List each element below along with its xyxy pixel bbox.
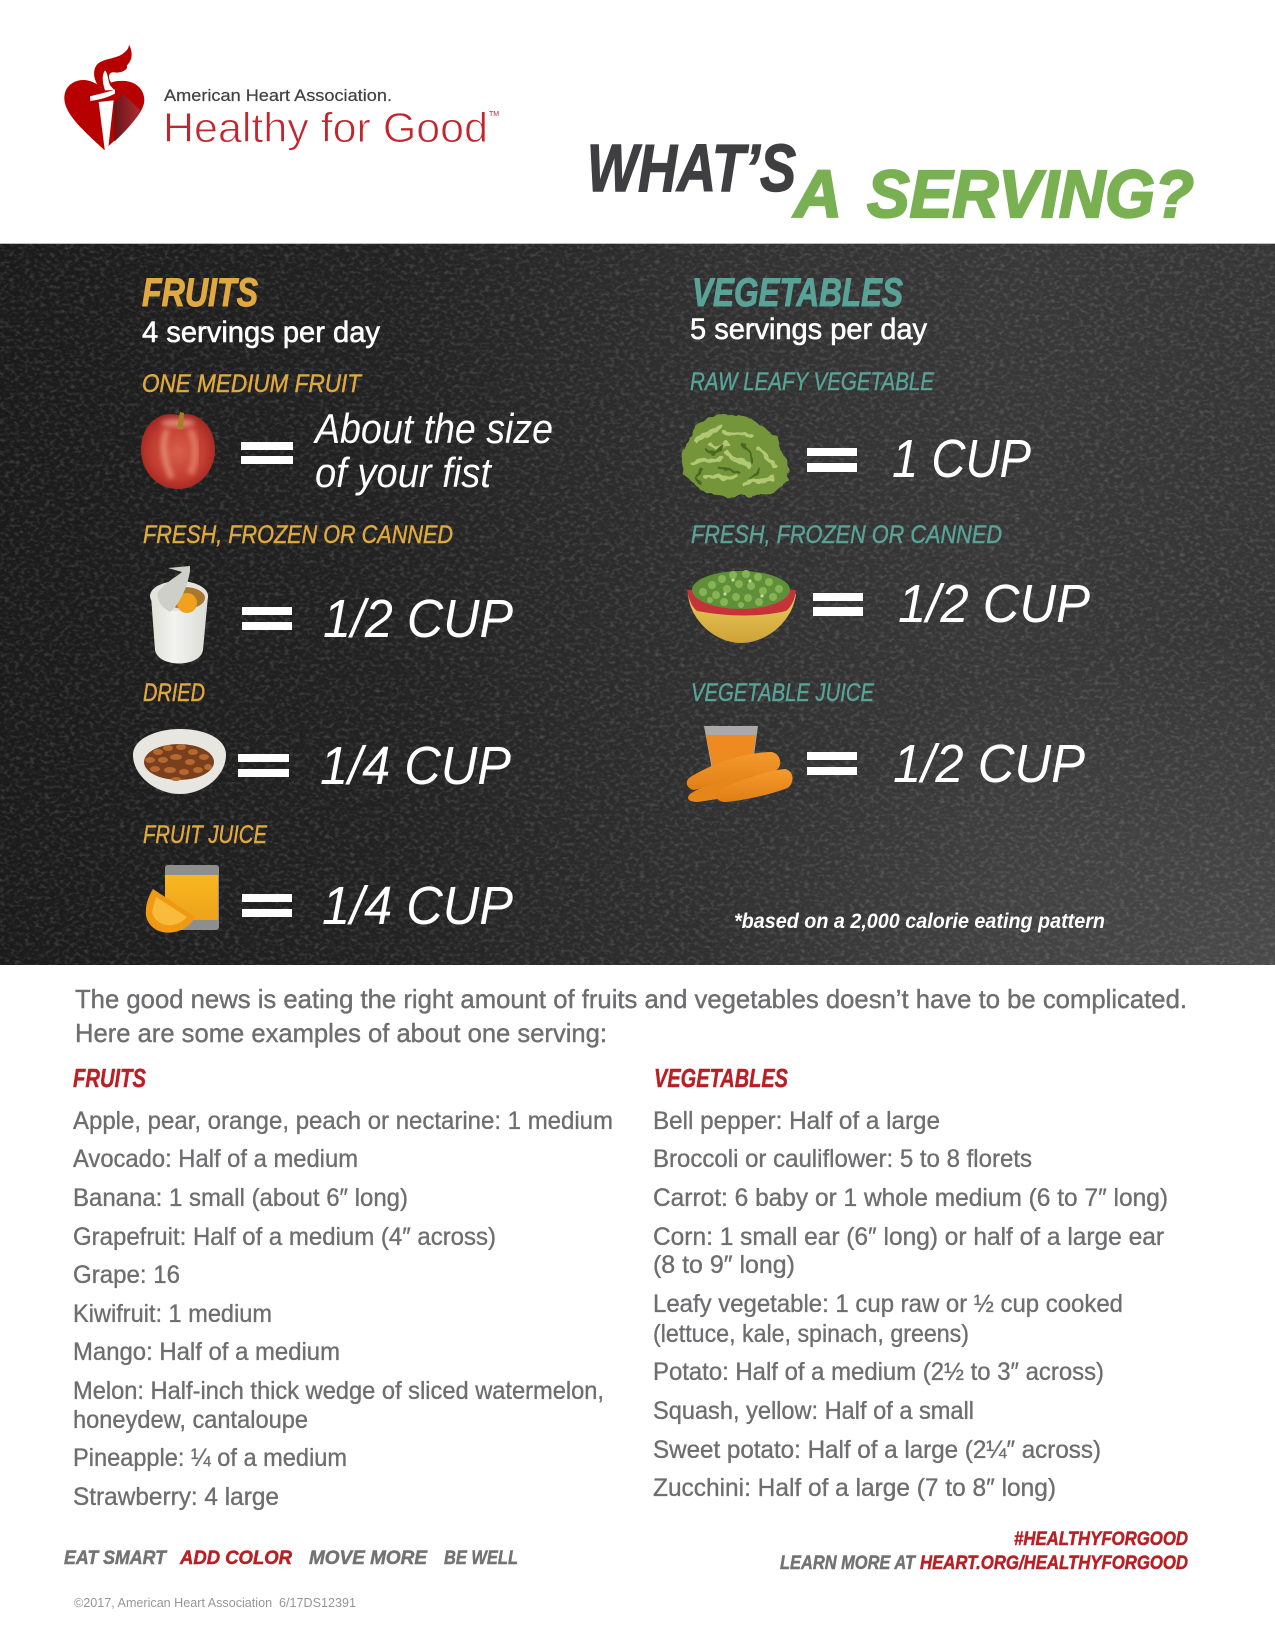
panel: dark chalkboard servings bbox=[0, 243, 1275, 965]
text: about the size of your fist bbox=[312, 405, 553, 496]
label: fresh, frozen or canned: FRESH, FROZEN OR CANNED bbox=[143, 521, 453, 549]
logo text: American Heart Association: American Heart Association. bbox=[164, 87, 392, 105]
list items: fruits: Kiwifruit: 1 medium bbox=[73, 1300, 272, 1328]
list items: vegetables: Leafy vegetable: 1 cup raw or ½ cup cooked bbox=[653, 1290, 1123, 1318]
list items: fruits: Grape: 16 bbox=[73, 1261, 180, 1289]
text: 1/4 cup: 1/4 CUP bbox=[322, 876, 513, 936]
text: 1/2 cup: 1/2 CUP bbox=[323, 589, 513, 649]
equals sign bbox=[807, 448, 857, 472]
icon: apple bbox=[141, 412, 215, 489]
intro text: The good news is eating the right amount of fruits and vegetables doesn’t have to be complicated. bbox=[75, 984, 1187, 1014]
list items: fruits bbox=[73, 1107, 613, 1511]
text: 1/2 cup: 1/2 CUP bbox=[893, 734, 1085, 794]
title line: What's: WHAT’S bbox=[587, 131, 796, 206]
label: vegetable juice: VEGETABLE JUICE bbox=[691, 679, 874, 707]
equals sign bbox=[238, 754, 289, 777]
list items: vegetables: Broccoli or cauliflower: 5 to 8 florets bbox=[653, 1145, 1032, 1173]
panel: vegetables column bbox=[682, 271, 1105, 933]
icon: carrot juice and carrots bbox=[687, 726, 792, 802]
list items: vegetables bbox=[653, 1107, 1168, 1502]
list heading: fruits: FRUITS bbox=[73, 1063, 147, 1093]
intro text: Here are some examples of about one serving: bbox=[75, 1018, 607, 1048]
title line: A Serving?: A bbox=[792, 157, 842, 232]
icon: heart and torch bbox=[64, 44, 144, 150]
equals sign bbox=[241, 442, 293, 464]
list items: fruits: Mango: Half of a medium bbox=[73, 1338, 340, 1366]
list items: fruits: Strawberry: 4 large bbox=[73, 1483, 279, 1511]
icon: orange juice and orange slice bbox=[146, 865, 219, 933]
logo text: Healthy for Good: Healthy for Good bbox=[163, 104, 488, 151]
footer slogan: ADD COLOR bbox=[179, 1548, 292, 1569]
heading: vegetables: VEGETABLES bbox=[692, 271, 903, 315]
equals sign bbox=[242, 607, 292, 630]
list items: vegetables: (lettuce, kale, spinach, greens) bbox=[653, 1320, 969, 1348]
text: about the size of your fist: of your fist bbox=[315, 449, 493, 496]
list items: fruits: Banana: 1 small (about 6″ long) bbox=[73, 1184, 408, 1212]
text: about the size of your fist: About the size bbox=[312, 405, 553, 452]
list items: fruits: honeydew, cantaloupe bbox=[73, 1406, 308, 1434]
footer slogan: MOVE MORE bbox=[309, 1548, 428, 1569]
title line: A Serving?: SERVING? bbox=[867, 157, 1194, 232]
list items: vegetables: Corn: 1 small ear (6″ long) or half of a large ear bbox=[653, 1223, 1164, 1251]
icon: lettuce bbox=[682, 414, 788, 497]
text: 1/4 cup: 1/4 CUP bbox=[320, 736, 511, 796]
heading: fruits: FRUITS bbox=[142, 271, 258, 315]
equals sign bbox=[242, 894, 292, 917]
list: fruit examples bbox=[73, 1063, 613, 1511]
footer call to action: HEART.ORG/HEALTHYFORGOOD bbox=[920, 1553, 1188, 1574]
text: 1/2 cup: 1/2 CUP bbox=[898, 574, 1090, 634]
logo: American Heart Association Healthy for Good bbox=[64, 44, 499, 151]
list heading: vegetables: VEGETABLES bbox=[654, 1063, 788, 1093]
equals sign bbox=[813, 593, 863, 616]
list items: fruits: Apple, pear, orange, peach or nectarine: 1 medium bbox=[73, 1107, 613, 1135]
list: vegetable examples bbox=[653, 1063, 1168, 1502]
list items: vegetables: Potato: Half of a medium (2½ to 3″ across) bbox=[653, 1358, 1104, 1386]
subheading: 4 servings per day: 4 servings per day bbox=[142, 316, 380, 349]
footer call to action: #HEALTHYFORGOOD bbox=[1014, 1529, 1188, 1550]
list items: vegetables: Zucchini: Half of a large (7 to 8″ long) bbox=[653, 1474, 1056, 1502]
label: raw leafy vegetable: RAW LEAFY VEGETABLE bbox=[690, 368, 934, 396]
text: 1 cup: 1 CUP bbox=[892, 429, 1031, 489]
label: dried: DRIED bbox=[143, 679, 205, 707]
panel: fruits column bbox=[133, 271, 553, 936]
subheading: 5 servings per day: 5 servings per day bbox=[690, 313, 927, 346]
list items: fruits: Pineapple: ¼ of a medium bbox=[73, 1444, 347, 1472]
footer slogan: BE WELL bbox=[444, 1548, 518, 1569]
list items: vegetables: Squash, yellow: Half of a small bbox=[653, 1397, 974, 1425]
icon: bowl of raisins bbox=[133, 729, 226, 794]
footer call to action: LEARN MORE AT bbox=[780, 1553, 916, 1574]
list items: vegetables: Carrot: 6 baby or 1 whole medium (6 to 7″ long) bbox=[653, 1184, 1168, 1212]
label: fresh, frozen or canned: FRESH, FROZEN OR CANNED bbox=[691, 521, 1002, 549]
footnote: 2,000 calorie eating pattern: *based on a 2,000 calorie eating pattern bbox=[734, 910, 1105, 933]
equals sign bbox=[807, 752, 857, 775]
footer slogan: EAT SMART bbox=[64, 1548, 167, 1569]
list items: vegetables: Bell pepper: Half of a large bbox=[653, 1107, 940, 1135]
icon: bowl of peas bbox=[687, 570, 796, 643]
intro text bbox=[75, 984, 1187, 1048]
label: one medium fruit: ONE MEDIUM FRUIT bbox=[142, 370, 363, 398]
list items: vegetables: (8 to 9″ long) bbox=[653, 1251, 795, 1279]
list items: fruits: Avocado: Half of a medium bbox=[73, 1145, 358, 1173]
label: fruit juice: FRUIT JUICE bbox=[143, 821, 267, 849]
list items: vegetables: Sweet potato: Half of a large (2¼″ across) bbox=[653, 1436, 1101, 1464]
footer call to action bbox=[780, 1529, 1188, 1574]
list items: fruits: Grapefruit: Half of a medium (4″ across) bbox=[73, 1223, 496, 1251]
list items: fruits: Melon: Half-inch thick wedge of sliced watermelon, bbox=[73, 1377, 604, 1405]
icon: can of fruit bbox=[150, 566, 208, 664]
title bbox=[587, 131, 1194, 232]
copyright: ©2017, American Heart Association 6/17DS12391 bbox=[74, 1596, 356, 1610]
footer slogan bbox=[64, 1548, 518, 1569]
logo trademark: TM bbox=[489, 111, 499, 118]
